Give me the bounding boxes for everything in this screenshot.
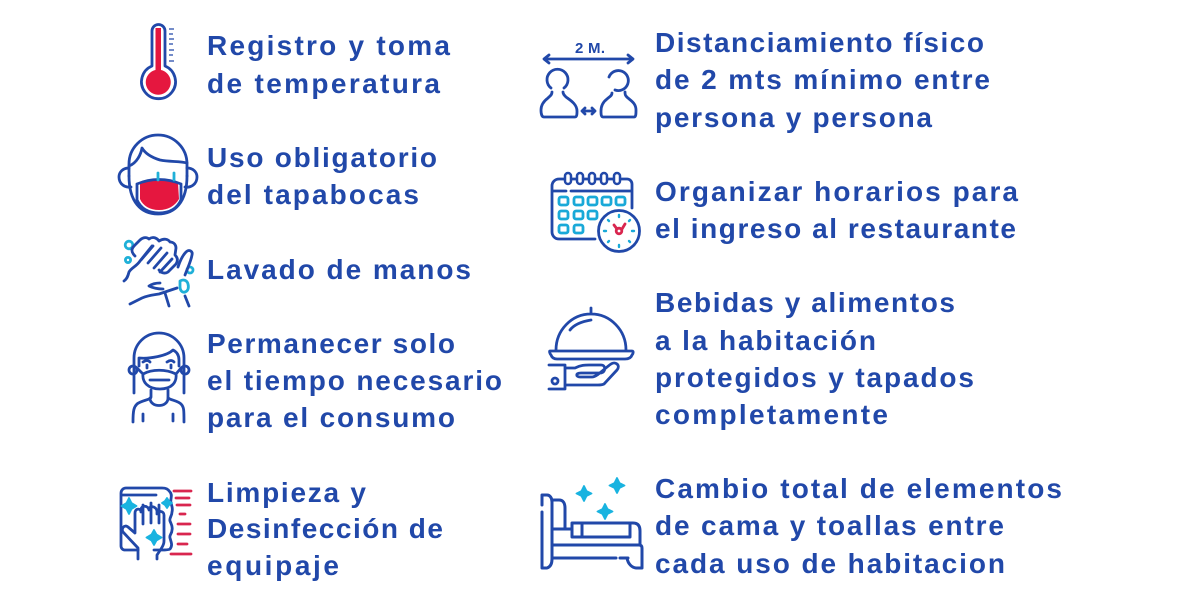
text: permanecer solo el tiempo necesario: para el consumo xyxy=(207,402,455,433)
icon: physical distancing two people xyxy=(541,40,636,117)
text: organizar horarios: el ingreso al restaurante xyxy=(655,213,1016,244)
text: lavado de manos: Lavado de manos xyxy=(207,254,471,285)
text: cambio total de elementos xyxy=(655,473,1062,579)
text: bebidas y alimentos: Bebidas y alimentos xyxy=(655,287,955,318)
icon: woman with mask xyxy=(129,333,189,422)
icon: physical distancing two people: 2 M. xyxy=(575,40,605,57)
text: limpieza y desinfeccion de equipaje xyxy=(207,477,443,581)
text: bebidas y alimentos: a la habitación xyxy=(655,325,876,356)
text: permanecer solo el tiempo necesario xyxy=(207,328,502,433)
text: bebidas y alimentos xyxy=(655,287,974,430)
text: bebidas y alimentos: protegidos y tapados xyxy=(655,362,974,393)
text: distanciamiento fisico xyxy=(655,27,990,133)
text: uso del tapabocas xyxy=(207,142,437,210)
icon: serving cloche on hand xyxy=(549,308,633,389)
text: distanciamiento fisico: persona y persona xyxy=(655,102,932,133)
text: distanciamiento fisico: Distanciamiento físico xyxy=(655,27,984,58)
text: permanecer solo el tiempo necesario: Permanecer solo xyxy=(207,328,455,359)
text: registro de temperatura: Registro y toma xyxy=(207,30,450,61)
icon: calendar with clock xyxy=(552,173,640,252)
text: organizar horarios xyxy=(655,176,1018,244)
text: cambio total de elementos: Cambio total de elementos xyxy=(655,473,1062,504)
text: bebidas y alimentos: completamente xyxy=(655,399,888,430)
text: limpieza y desinfeccion de equipaje: Limpieza y xyxy=(207,477,366,508)
icon: hand disinfecting luggage xyxy=(121,488,191,559)
icon: washing hands xyxy=(124,238,193,306)
text: distanciamiento fisico: de 2 mts mínimo entre xyxy=(655,64,990,95)
text: registro de temperatura xyxy=(207,30,450,99)
text: uso del tapabocas: Uso obligatorio xyxy=(207,142,437,173)
icon: bed with sparkles xyxy=(542,478,642,568)
text: cambio total de elementos: cada uso de habitacion xyxy=(655,548,1005,579)
icon: face with red mask xyxy=(119,135,197,214)
icon: thermometer xyxy=(142,24,175,99)
text: limpieza y desinfeccion de equipaje: equipaje xyxy=(207,550,339,581)
text: cambio total de elementos: de cama y toallas entre xyxy=(655,510,1004,541)
text: registro de temperatura: de temperatura xyxy=(207,68,440,99)
text: organizar horarios: Organizar horarios para xyxy=(655,176,1018,207)
text: limpieza y desinfeccion de equipaje: Desinfección de xyxy=(207,513,443,544)
text: uso del tapabocas: del tapabocas xyxy=(207,179,419,210)
text: permanecer solo el tiempo necesario: el tiempo necesario xyxy=(207,365,502,396)
